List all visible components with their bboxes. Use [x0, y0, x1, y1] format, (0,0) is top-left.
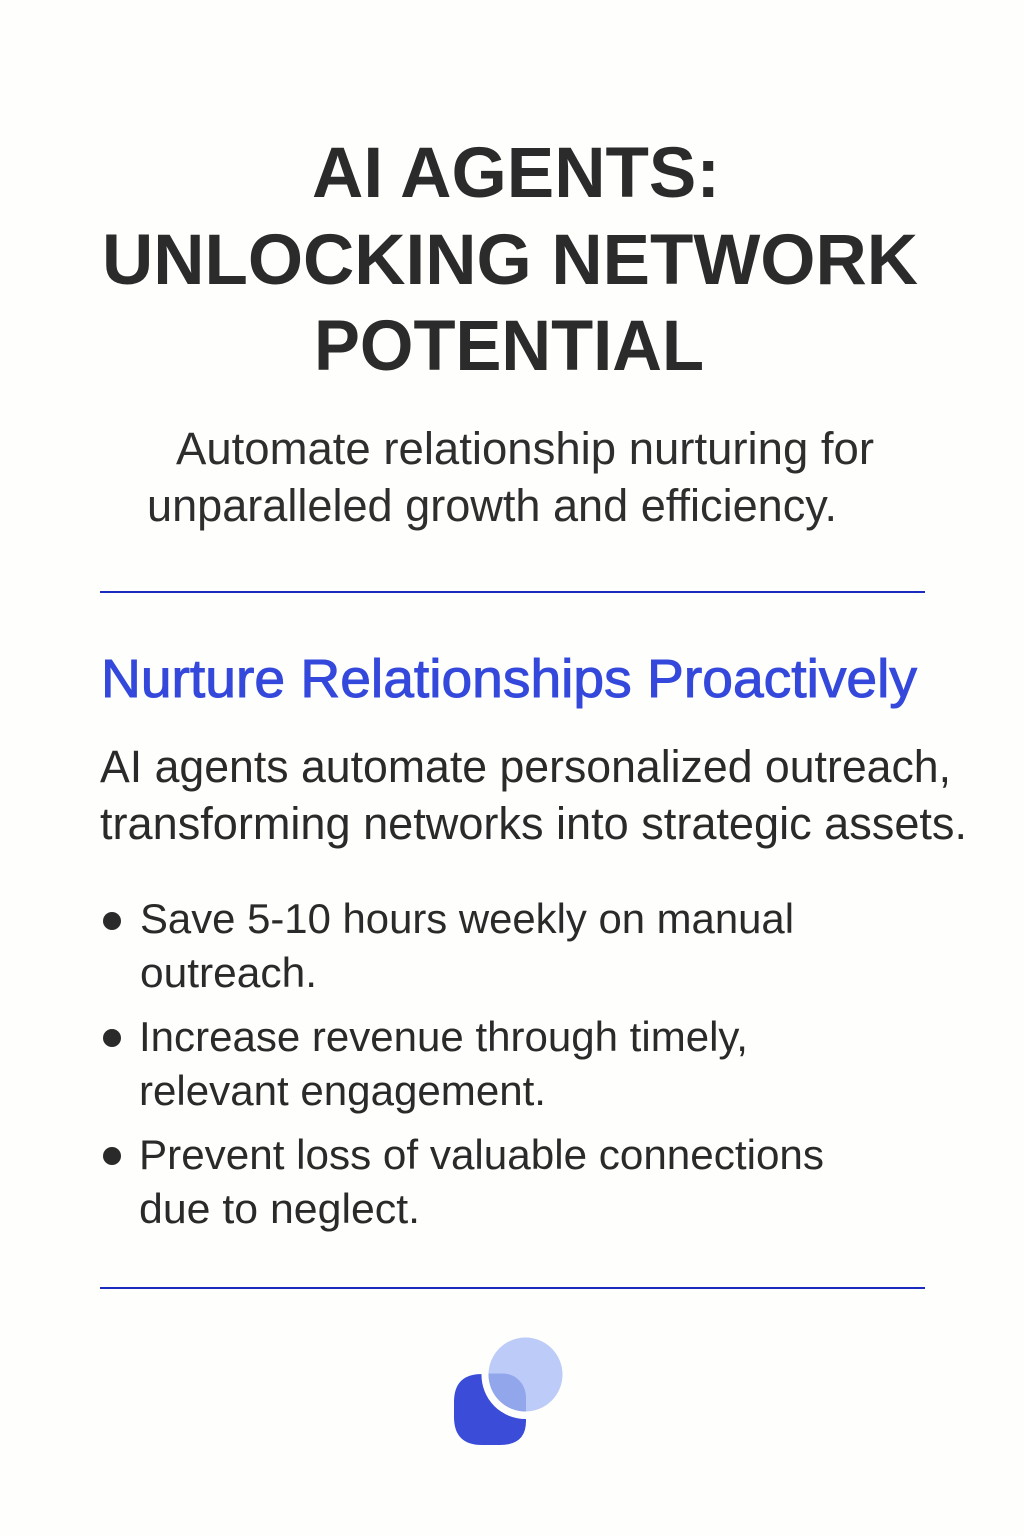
bullet 2: relevant engagement.	[139, 1067, 546, 1114]
intro text: transforming networks into strategic assets.	[100, 798, 967, 849]
intro text: AI agents automate personalized outreach,	[100, 741, 951, 792]
bullet 2: Increase revenue through timely,	[139, 1013, 748, 1060]
subtitle	[147, 423, 874, 531]
title: UNLOCKING NETWORK	[102, 221, 918, 300]
bullet 3: due to neglect.	[139, 1185, 420, 1232]
subtitle: unparalleled growth and efficiency.	[147, 480, 837, 531]
intro text	[100, 741, 967, 849]
subtitle: Automate relationship nurturing for	[176, 423, 874, 474]
section heading: Nurture Relationships Proactively	[101, 649, 917, 709]
title: POTENTIAL	[314, 307, 704, 386]
icon: overlapping logo	[454, 1338, 562, 1445]
bullet 2	[103, 1013, 748, 1114]
bullet 3	[103, 1131, 824, 1232]
title	[102, 134, 918, 386]
bullet list	[103, 895, 824, 1232]
bullet 1: outreach.	[140, 949, 317, 996]
title: AI AGENTS:	[312, 134, 720, 213]
bullet 1	[103, 895, 794, 996]
bullet 1: Save 5-10 hours weekly on manual	[140, 895, 794, 942]
bullet 3: Prevent loss of valuable connections	[139, 1131, 824, 1178]
